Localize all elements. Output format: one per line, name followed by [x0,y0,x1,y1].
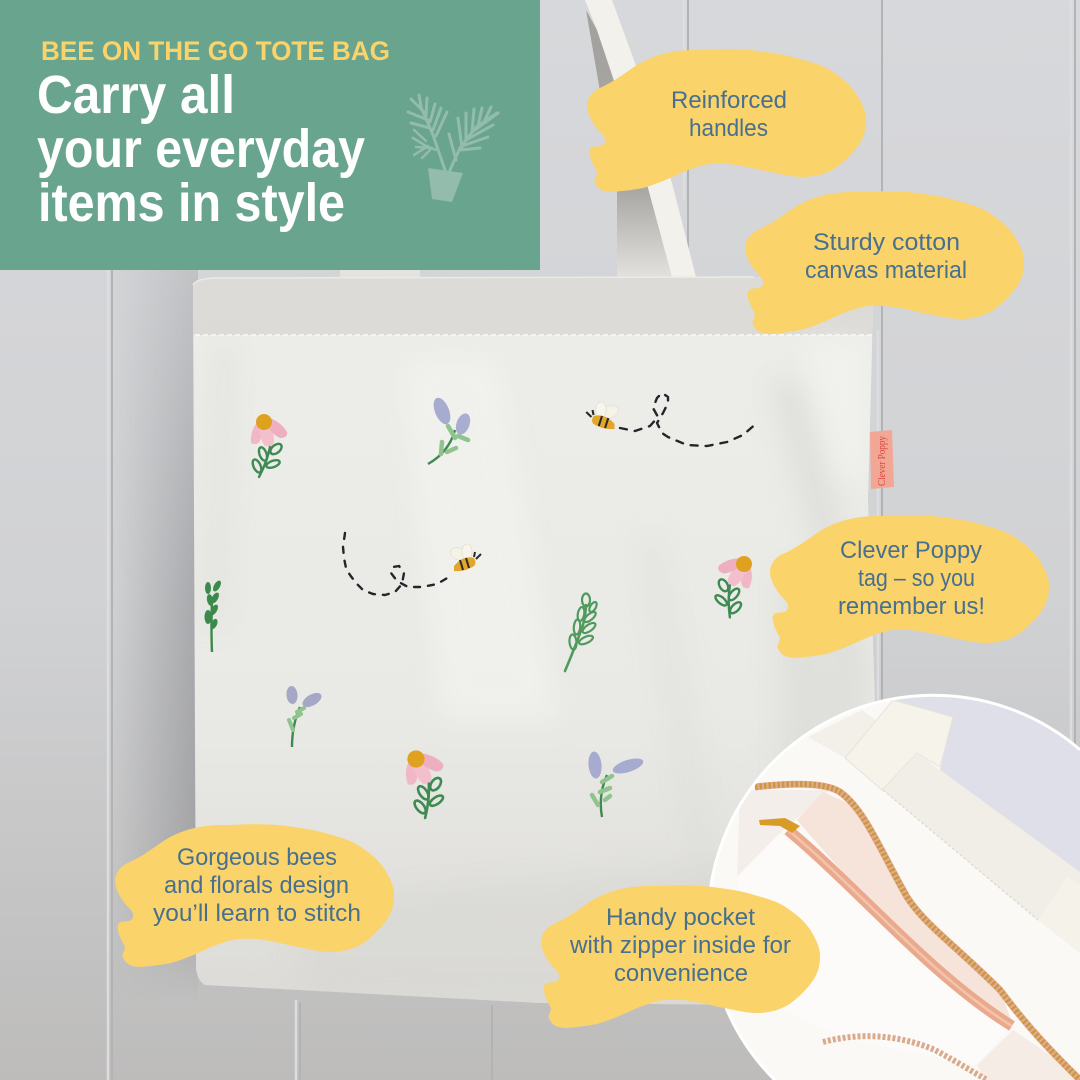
embroidery: leaf sprig left [204,579,223,652]
top hem band [190,276,880,335]
embroidery: lavender bottom [587,751,645,817]
embroidery: bee 1 with dashed flight path [586,393,758,446]
callout: clever poppy tag [770,515,1049,658]
callout: sturdy cotton canvas: Sturdy cotton [813,229,960,256]
callout: reinforced handles [587,49,866,192]
pink pouch interior [797,792,1013,1025]
callout: zipper pocket [541,885,820,1028]
callout: sturdy cotton canvas: canvas material [805,257,967,284]
callout: zipper pocket: convenience [614,960,748,987]
inset circle: zipper pocket detail [700,690,1080,1080]
callout: bees and florals [115,824,394,967]
icon: potted plant [408,95,498,202]
main heading [37,65,365,233]
callout: reinforced handles: Reinforced [671,87,787,114]
callout: bees and florals: and florals design [164,872,349,899]
eyebrow heading: BEE ON THE GO TOTE BAG [41,36,390,66]
title panel [0,0,540,270]
embroidery: coneflower bottom [400,745,455,820]
main heading: Carry all [37,65,235,125]
pocket shadow area [737,790,830,877]
handle webbing loop [845,700,953,790]
white pocket front [737,833,1010,1065]
embroidery: bee 2 with dashed flight path [343,533,481,595]
callout: reinforced handles: handles [689,115,768,142]
callout: zipper pocket: with zipper inside for [569,932,791,959]
inset background [700,690,1080,1080]
tote bag [190,276,880,1006]
callout: zipper pocket: Handy pocket [606,904,755,931]
embroidery: lavender top [428,395,473,464]
main heading: items in style [38,173,345,233]
main zipper tape [755,784,1080,1080]
top bag edge [808,710,878,758]
callout: clever poppy tag: Clever Poppy [840,537,982,564]
embroidery: leaf sprig centre [565,594,598,671]
lavender backdrop [896,696,1080,872]
tote bag handles [340,0,696,279]
bottom zipper [823,1036,987,1080]
embroidery: coneflower right [703,549,759,620]
strap webbing right [1038,877,1080,953]
lower peach zipper tape [788,830,1012,1026]
Clever Poppy fabric tag: Clever Poppy [876,436,888,486]
zipper slider [759,818,800,833]
embroidery: lavender left [286,686,324,747]
callout: sturdy cotton canvas [745,191,1024,334]
main heading: your everyday [37,119,365,179]
callout: clever poppy tag: remember us! [838,593,985,620]
Clever Poppy fabric tag [870,430,894,489]
embroidery: coneflower top left [251,414,287,477]
strap band [884,754,1080,920]
callout: bees and florals: you’ll learn to stitch [153,900,361,927]
main zipper teeth [755,784,1080,1080]
callout: bees and florals: Gorgeous bees [177,844,337,871]
callout: clever poppy tag: tag – so you [858,565,975,592]
